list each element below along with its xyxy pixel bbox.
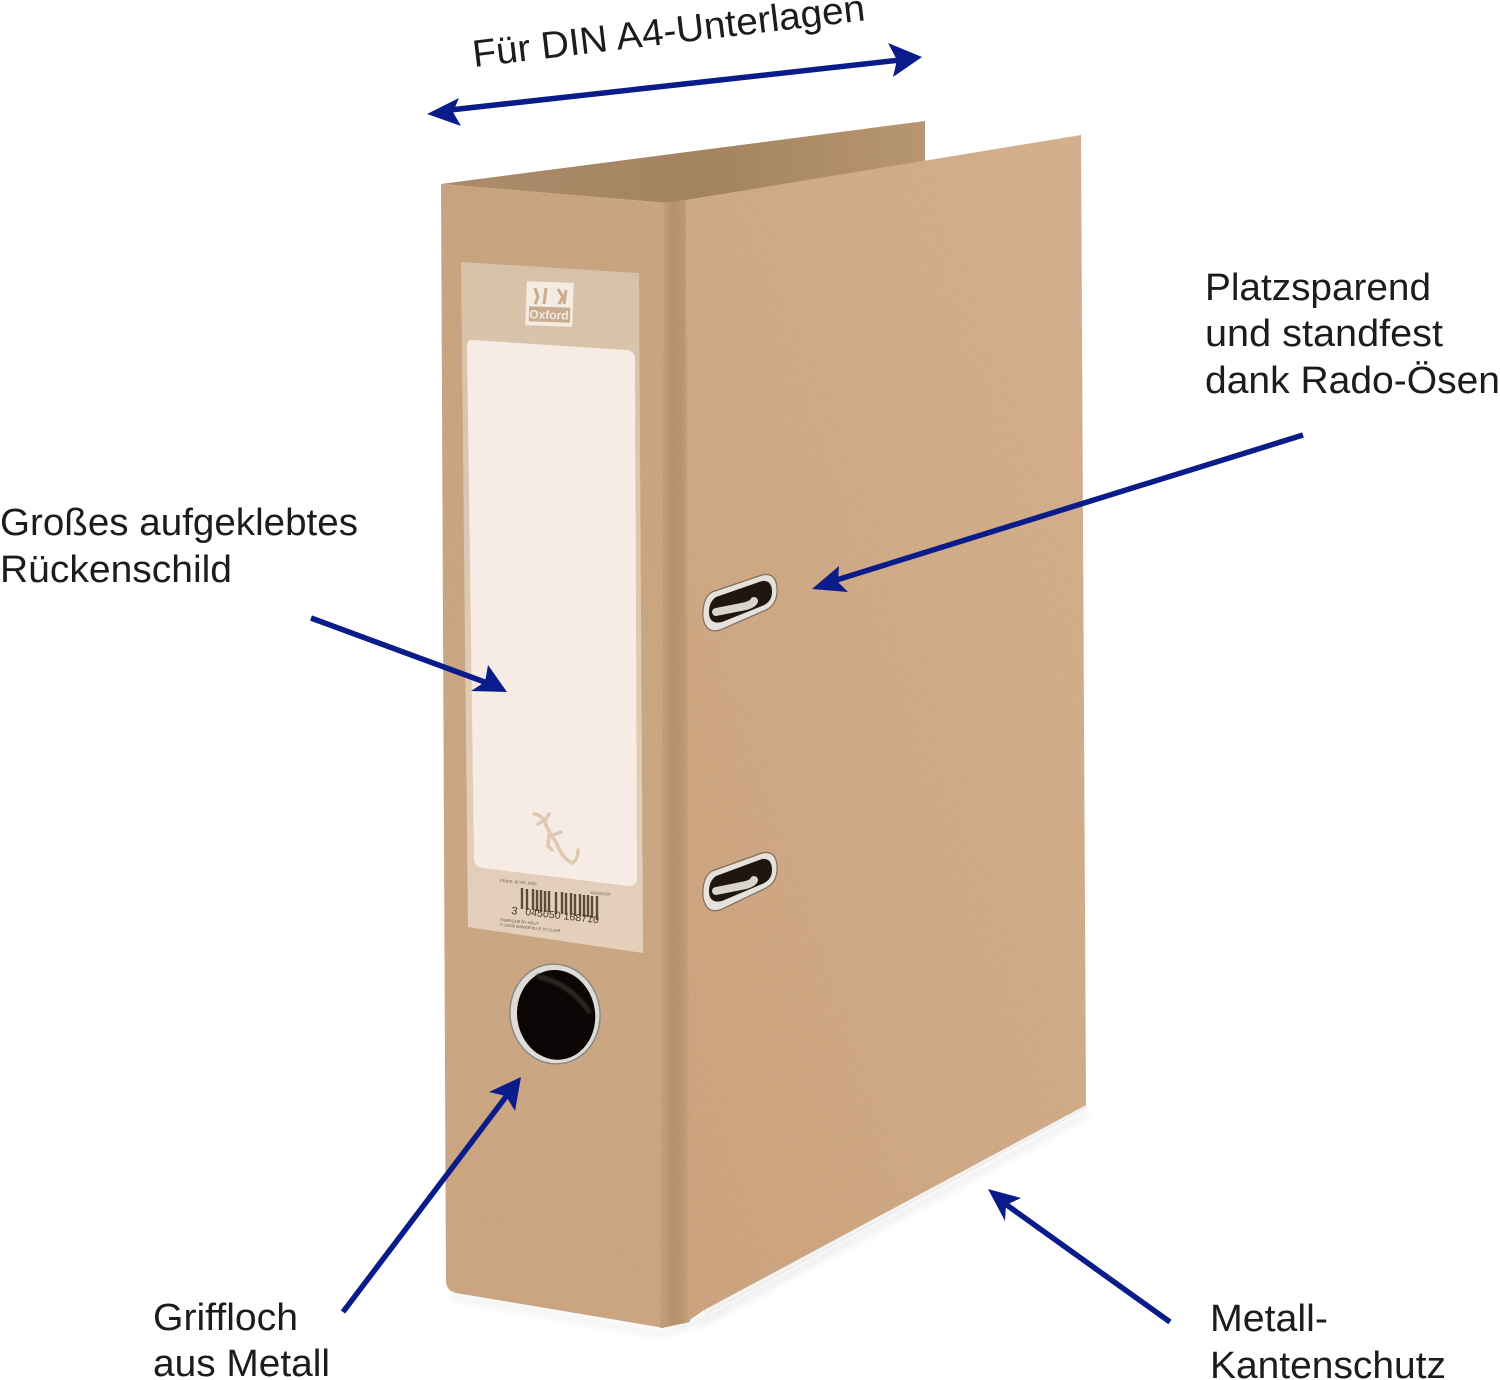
icon: gecko <box>534 814 578 863</box>
hinge <box>660 200 690 1328</box>
text: Griffloch: Griffloch <box>153 1297 298 1339</box>
text: Rückenschild: Rückenschild <box>0 549 232 591</box>
arrow: to label <box>311 618 507 692</box>
barcode: 100200104 <box>590 890 611 897</box>
arrow: to finger hole <box>343 1077 521 1312</box>
text: Platzsparend: und standfest <box>1205 313 1443 355</box>
text: Rückenschild <box>0 502 358 591</box>
barcode: F-14000 MANDEVILLE ST CLAIR <box>500 922 561 933</box>
arrow: to eyelet <box>812 435 1303 592</box>
back cover inside <box>441 121 925 203</box>
binder <box>441 121 1088 1336</box>
text: Metall-Kantenschutz: Metall- <box>1210 1298 1328 1340</box>
ring eyelet upper <box>703 575 777 631</box>
text: Platzsparend <box>1205 267 1500 402</box>
barcode: 3 <box>511 905 518 918</box>
finger hole <box>503 958 607 1070</box>
barcode <box>500 878 611 933</box>
arrow: to metal edge <box>988 1189 1170 1322</box>
icon: Oxford logo: Oxford <box>529 307 569 323</box>
binder shadow <box>450 1112 1088 1336</box>
ring eyelet lower <box>703 853 777 911</box>
text: Platzsparend: dank Rado-Ösen <box>1205 360 1500 402</box>
barcode: 045050 168710 <box>525 907 600 926</box>
text: Griffloch <box>153 1297 330 1380</box>
label fine print: PRICE: BLYPL 8440 <box>500 878 537 886</box>
barcode: FABRIQUE BY HELIT <box>500 917 540 926</box>
metal edge protection <box>704 1105 1086 1314</box>
icon: Oxford logo <box>525 281 574 327</box>
front cover <box>684 135 1086 1324</box>
arrow: width double arrow <box>427 43 922 126</box>
spine label panel <box>461 262 643 953</box>
text: Rückenschild: Großes aufgeklebtes <box>0 502 358 544</box>
text: Platzsparend: Platzsparend <box>1205 267 1431 309</box>
text: Metall-Kantenschutz <box>1210 1298 1446 1380</box>
spine <box>441 184 668 1328</box>
white writing area <box>467 340 637 886</box>
